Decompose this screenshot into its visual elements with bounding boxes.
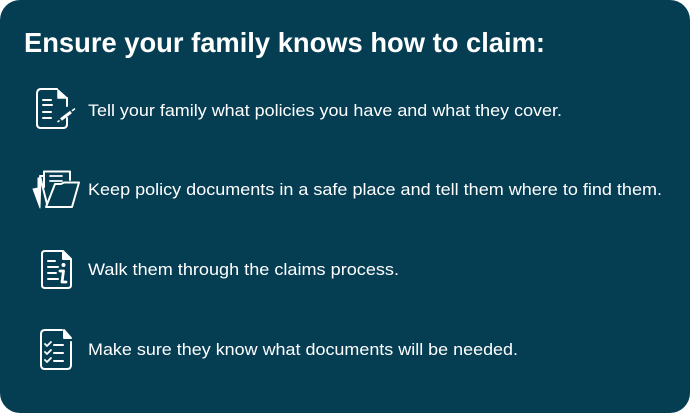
text: walk them through: Walk them through the claims process. — [88, 260, 399, 279]
folded wedge — [33, 178, 41, 208]
second sheet — [40, 176, 47, 204]
icon: document with checklist — [41, 330, 71, 369]
paper lines — [50, 176, 62, 181]
back paper — [44, 172, 70, 187]
folder — [46, 182, 79, 207]
text: make sure they know: Make sure they know what documents will be needed. — [88, 340, 518, 359]
title: Ensure your family knows how to claim: — [24, 27, 545, 58]
icon: document with info symbol — [42, 251, 71, 288]
text: keep policy documents: Keep policy documents in a safe place and tell them where to find them. — [88, 180, 662, 199]
text: tell your family: Tell your family what policies you have and what they cover. — [88, 101, 562, 120]
icon: document with pen — [37, 89, 74, 128]
icon: folder with documents — [33, 172, 79, 208]
